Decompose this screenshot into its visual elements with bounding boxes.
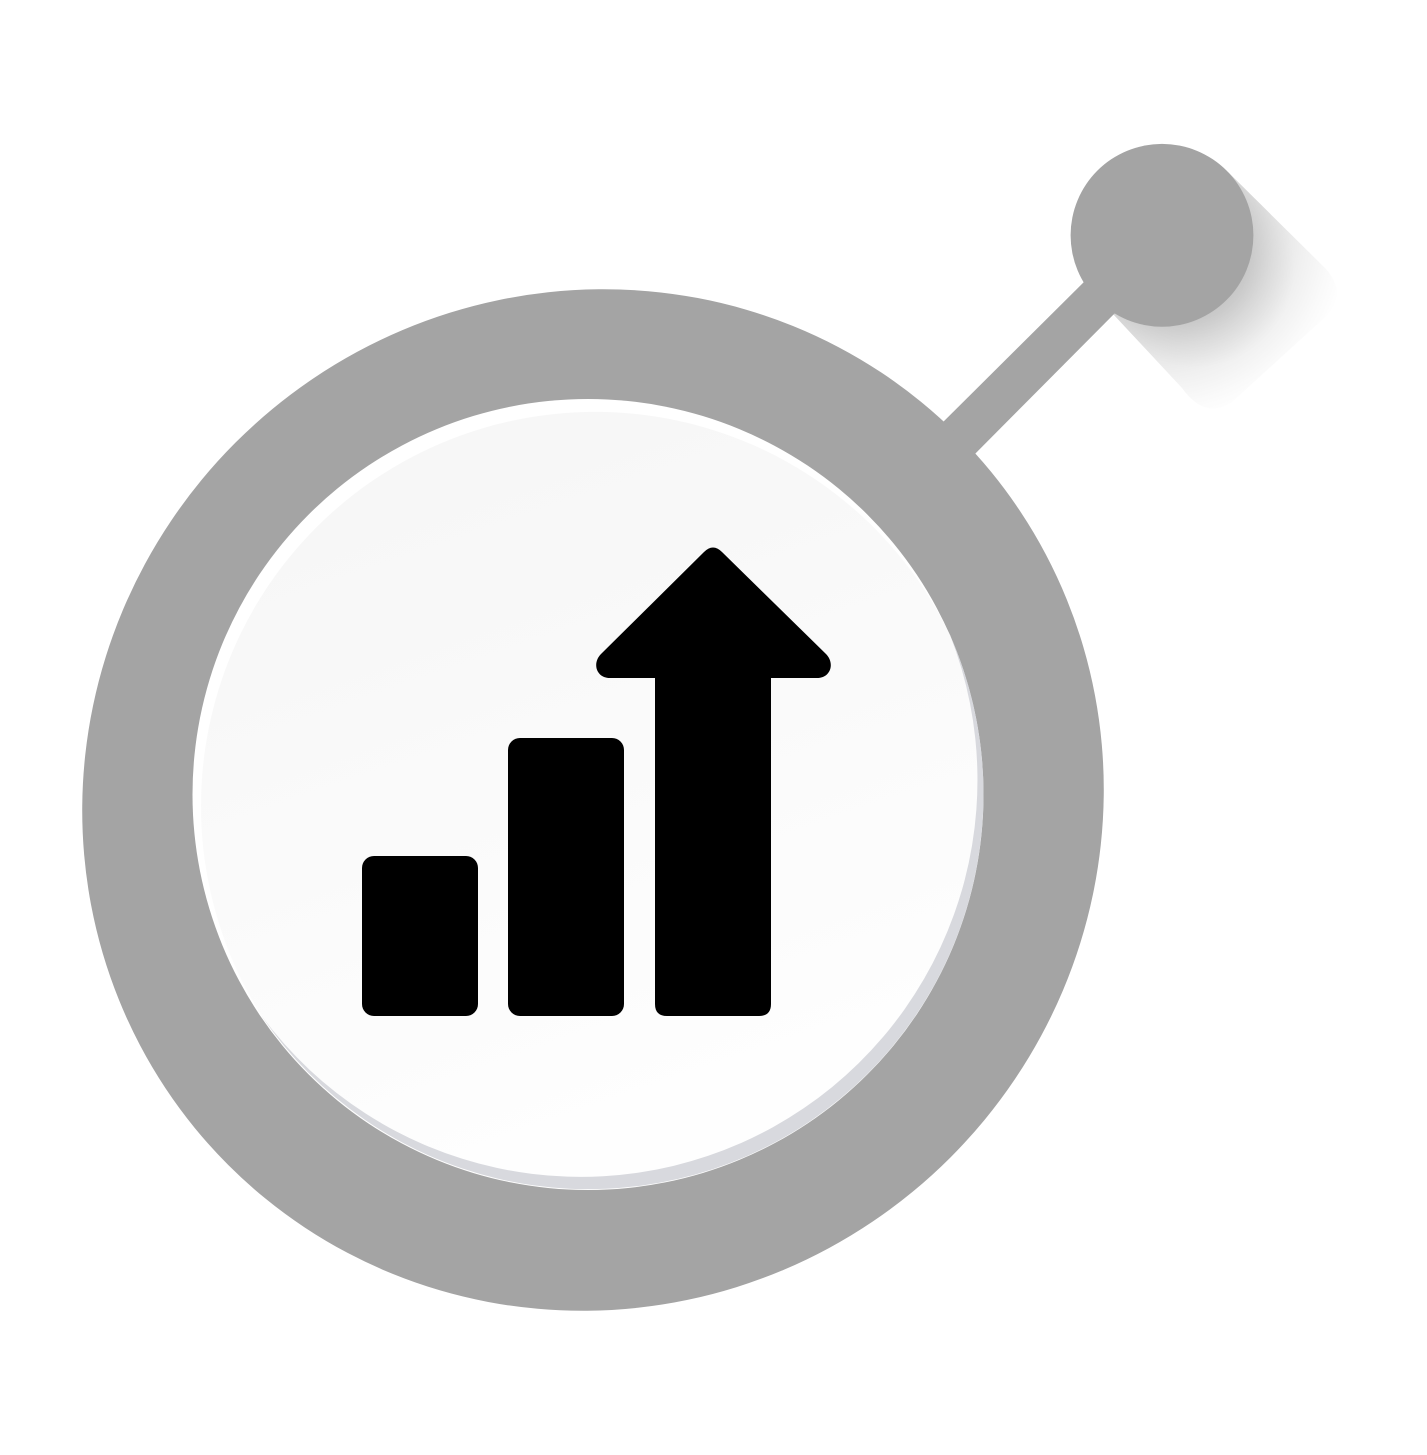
long shadow of the knob bbox=[1113, 172, 1337, 408]
medium bar bbox=[508, 738, 624, 1016]
lens highlight rim bbox=[192, 399, 984, 1190]
icon: bar chart with rising arrow bbox=[362, 548, 831, 1016]
knob circle bbox=[1071, 144, 1253, 327]
connector stem bbox=[930, 274, 1122, 467]
lens face bbox=[201, 412, 977, 1177]
arrow rising bbox=[596, 548, 831, 1016]
lens lower-right shadow crescent bbox=[262, 635, 983, 1189]
small bar bbox=[362, 856, 478, 1016]
